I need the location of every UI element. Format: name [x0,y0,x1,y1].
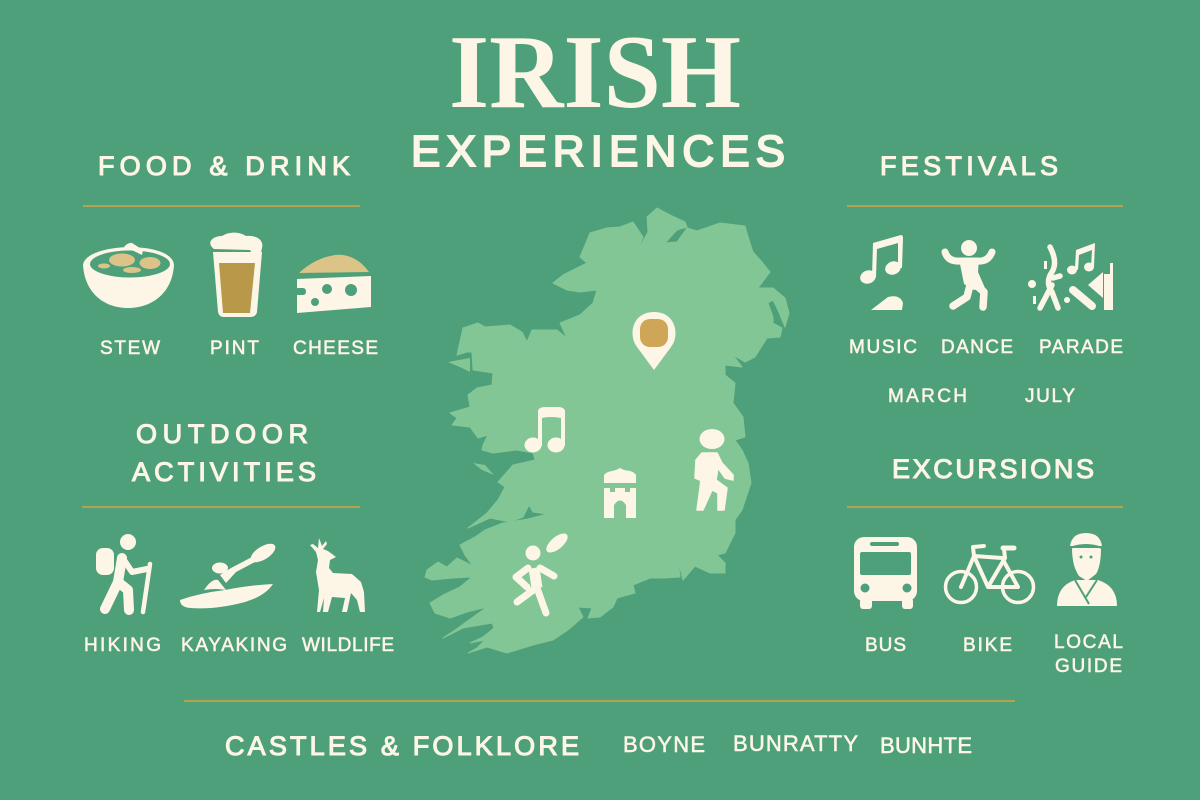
music note on map [524,407,565,452]
panel: festivals [847,151,1123,407]
person on map [695,429,733,510]
label: parade: PARADE [1039,337,1123,358]
icon: dancer [945,240,992,307]
label: dance: DANCE [941,337,1013,358]
heading: outdoor activities [132,419,316,487]
icon: hiker [96,534,150,612]
icon: music [858,235,903,310]
label: bunratty: BUNRATTY [733,731,858,756]
heading: castles and folklore: CASTLES & FOLKLORE [225,731,579,761]
panel: excursions [847,454,1123,677]
label: music: MUSIC [849,337,917,358]
map of Ireland [425,208,789,653]
icon: bike [946,546,1034,602]
icon: parade [1028,243,1113,310]
heading: festivals: FESTIVALS [880,151,1058,181]
label: stew: STEW [100,338,160,359]
label: cheese: CHEESE [293,338,378,359]
icon: stew [83,243,174,308]
label: hiking: HIKING [84,635,161,656]
icon: pint [210,233,262,317]
label: local guide: LOCAL [1054,632,1123,653]
heading: food and drink: FOOD & DRINK [98,151,350,181]
label: local guide [1054,632,1123,677]
runner on map [516,530,571,613]
panel: castles and folklore [184,700,1015,761]
title: EXPERIENCES [411,127,785,176]
icon: deer [310,538,365,612]
title: IRISH [449,13,741,130]
label: local guide: GUIDE [1055,656,1122,677]
panel: food and drink [83,151,378,359]
island: Aran [473,463,494,475]
label: bus: BUS [865,635,906,656]
heading: outdoor activities: ACTIVITIES [132,457,316,487]
icon: kayak [180,540,278,608]
label: boyne: BOYNE [623,732,705,757]
icon: cheese [295,255,371,313]
icon: bus [854,537,917,609]
label: march: MARCH [888,386,967,407]
label: july: JULY [1025,386,1075,407]
island: Achill [448,358,470,372]
label: bunhte: BUNHTE [880,733,972,758]
castle on map [604,468,636,518]
label: pint: PINT [210,338,259,359]
pin marker [633,312,675,370]
icon: local guide [1057,533,1117,606]
label: kayaking: KAYAKING [181,635,287,656]
heading: outdoor activities: OUTDOOR [136,419,308,449]
label: bike: BIKE [963,635,1012,656]
heading: excursions: EXCURSIONS [892,454,1094,484]
title [411,13,785,176]
panel: outdoor activities [82,419,394,656]
label: wildlife: WILDLIFE [302,635,394,656]
